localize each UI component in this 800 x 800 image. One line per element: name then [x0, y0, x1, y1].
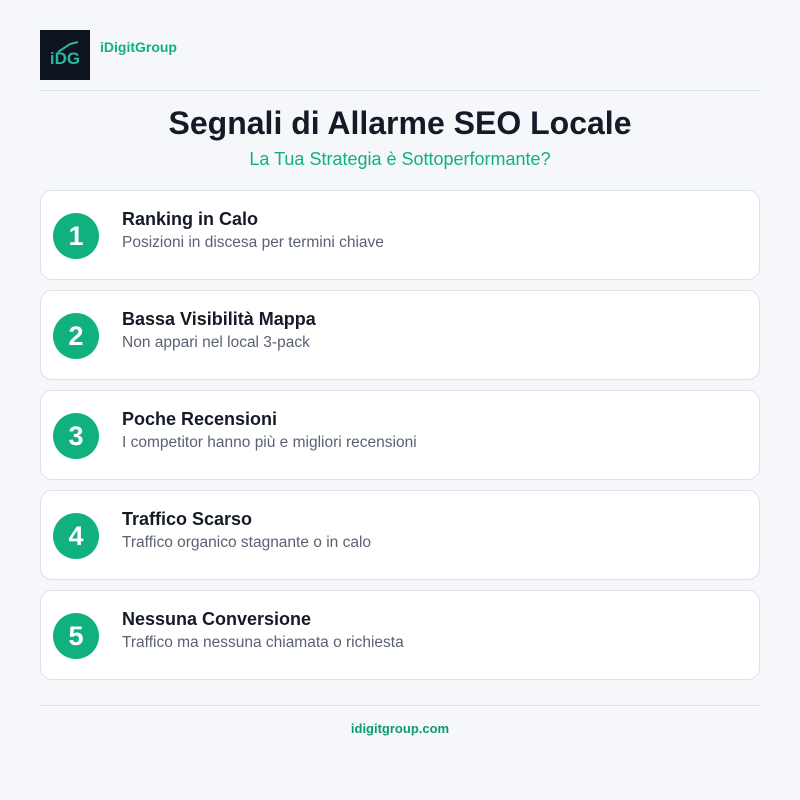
- card 1: Posizioni in discesa per termini chiave: [122, 234, 384, 251]
- card 3: [40, 390, 760, 480]
- card 1: 1: [68, 221, 84, 251]
- card 5: [40, 590, 760, 680]
- card 4: [40, 490, 760, 580]
- card 1: Ranking in Calo: [122, 209, 258, 229]
- logo: [40, 30, 90, 80]
- title: Segnali di Allarme SEO Locale: [169, 105, 631, 141]
- card 5: Nessuna Conversione: [122, 609, 311, 629]
- card 3: Poche Recensioni: [122, 409, 277, 429]
- footer: idigitgroup.com: [351, 721, 449, 736]
- card 5: Traffico ma nessuna chiamata o richiesta: [122, 634, 404, 651]
- card 4: 4: [68, 521, 84, 551]
- subtitle: La Tua Strategia è Sottoperformante?: [249, 149, 551, 169]
- brand name: iDigitGroup: [100, 39, 177, 55]
- card 1: [40, 190, 760, 280]
- card 2: Non appari nel local 3-pack: [122, 334, 310, 351]
- card 2: 2: [68, 321, 84, 351]
- card 2: Bassa Visibilità Mappa: [122, 309, 316, 329]
- card 5: 5: [68, 621, 84, 651]
- logo: iDG: [50, 49, 80, 68]
- card 4: Traffico organico stagnante o in calo: [122, 534, 371, 551]
- card 2: [40, 290, 760, 380]
- card 3: 3: [68, 421, 84, 451]
- card 4: Traffico Scarso: [122, 509, 252, 529]
- card 3: I competitor hanno più e migliori recensioni: [122, 434, 417, 451]
